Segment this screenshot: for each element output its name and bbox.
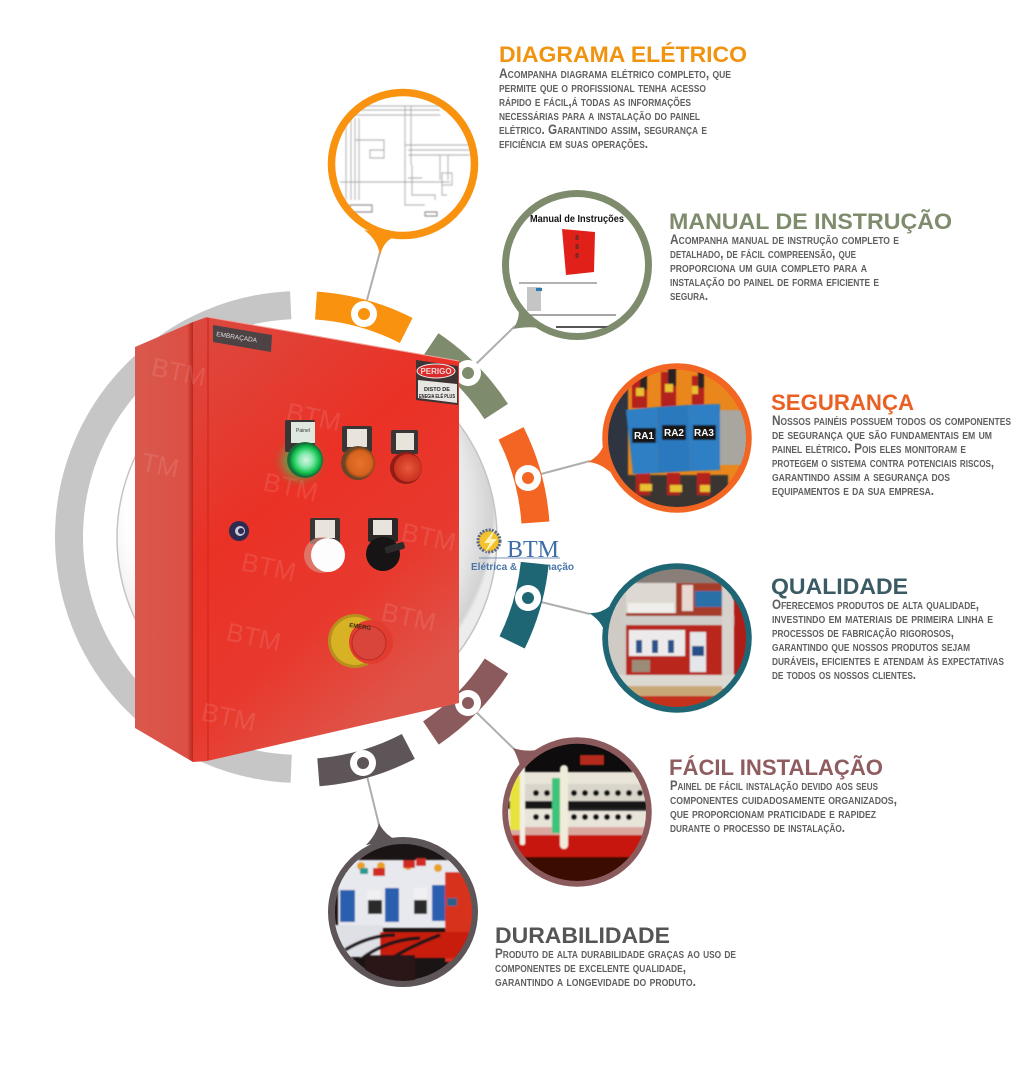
body: de segurança que são fundamentais em um	[772, 426, 992, 442]
terminal blocks photo	[506, 755, 648, 887]
callout circle: diagrama elétrico	[332, 92, 474, 256]
body: eficiência em suas operações.	[499, 135, 648, 151]
ring segment: diagrama	[50, 289, 550, 789]
body: Acompanha diagrama elétrico completo, que	[499, 65, 731, 81]
callout circle: durabilidade	[332, 823, 474, 984]
ring segment: manual	[0, 214, 625, 864]
watermarks: BTM	[239, 547, 299, 587]
body: processos de fabricação rigorosos,	[772, 624, 954, 640]
body: segura.	[670, 287, 708, 303]
body	[495, 945, 736, 989]
text block: segurança	[771, 390, 1011, 498]
watermarks	[139, 352, 459, 737]
body: permite que o profissional tenha acesso	[499, 79, 706, 95]
white button	[304, 518, 345, 573]
body: durante o processo de instalação.	[670, 819, 845, 835]
amber light	[341, 426, 375, 480]
watermarks: BTM	[399, 517, 459, 557]
body: componentes de excelente qualidade,	[495, 959, 686, 975]
warning sign: ENEGIA ELÉ PLUS	[419, 392, 456, 400]
body: Produto de alta durabilidade graças ao uso de	[495, 945, 736, 961]
manual photo	[519, 214, 624, 327]
connector lines	[366, 252, 590, 825]
emergency stop	[328, 614, 393, 668]
callout circle: fácil instalação	[506, 740, 648, 887]
body: proporciona um guia completo para a	[670, 259, 867, 275]
grey outer ring	[59, 295, 543, 779]
body	[772, 596, 1004, 682]
watermarks: BTM	[149, 352, 209, 392]
body	[670, 777, 897, 835]
heading: MANUAL DE INSTRUÇÃO	[669, 209, 952, 234]
heading: DIAGRAMA ELÉTRICO	[499, 42, 747, 67]
body	[670, 231, 899, 303]
body: que proporcionam praticidade e rapidez	[670, 805, 876, 821]
panel interior photo	[608, 569, 746, 707]
body: painel elétrico. Pois eles monitoram e	[772, 440, 966, 456]
warning sign: DISTO DE	[424, 387, 450, 393]
body: Acompanha manual de instrução completo e	[670, 231, 899, 247]
watermarks: BTM	[261, 467, 321, 507]
dark label: EMBRAÇADA	[216, 331, 258, 345]
callout circle: manual de instrução	[506, 194, 648, 336]
body: componentes cuidadosamente organizados,	[670, 791, 897, 807]
green light	[282, 420, 323, 479]
body: instalação do painel de forma eficiente e	[670, 273, 879, 289]
body: Oferecemos produtos de alta qualidade,	[772, 596, 979, 612]
watermarks: BTM	[379, 597, 439, 637]
text block: durabilidade	[495, 923, 736, 989]
callout circle: segurança	[588, 365, 750, 515]
BTM logo: Elétrica & Automação	[471, 561, 574, 573]
text block: fácil instalação	[669, 755, 897, 835]
ring segment: fácil instalação	[0, 215, 624, 863]
manual photo: Manual de Instruções	[530, 214, 624, 225]
selector switch	[366, 518, 405, 571]
heading: SEGURANÇA	[771, 390, 914, 415]
text block: qualidade	[771, 574, 1004, 682]
body	[499, 65, 731, 151]
ring segment: segurança	[0, 222, 617, 856]
panel front	[193, 317, 459, 762]
BTM logo: BTM	[507, 537, 559, 563]
body	[772, 412, 1011, 498]
body: garantindo a longevidade do produto.	[495, 973, 696, 989]
heading: QUALIDADE	[771, 574, 908, 599]
callout circle: segurança: RA2	[664, 428, 684, 439]
callout circle: segurança: RA3	[694, 428, 714, 439]
dark label	[213, 325, 272, 352]
BTM logo	[471, 529, 574, 573]
body: investindo em materiais de primeira linha e	[772, 610, 993, 626]
ring segment: durabilidade	[0, 223, 616, 855]
callout circle: segurança: RA1	[634, 431, 654, 442]
body: detalhado, de fácil compreensão, que	[670, 245, 856, 261]
body: de todos os nossos clientes.	[772, 666, 916, 682]
text block: diagrama elétrico	[499, 42, 747, 151]
ring segment: qualidade	[41, 280, 559, 798]
body: garantindo que nossos produtos sejam	[772, 638, 970, 654]
callout circle: qualidade	[589, 565, 750, 716]
body: equipamentos e da sua empresa.	[772, 482, 934, 498]
electrical diagram photo	[340, 106, 470, 216]
red electrical panel	[135, 317, 459, 762]
contactors photo	[333, 858, 473, 983]
body: garantindo assim a segurança dos	[772, 468, 950, 484]
watermarks: BTM	[224, 617, 284, 657]
voltage indicator	[229, 521, 249, 541]
text block: manual de instrução	[669, 209, 952, 303]
green light: Painel	[296, 428, 310, 434]
red button	[390, 430, 422, 484]
heading: FÁCIL INSTALAÇÃO	[669, 755, 883, 780]
watermarks: BTM	[199, 697, 259, 737]
heading: DURABILIDADE	[495, 923, 670, 948]
body: necessárias para a instalação do painel	[499, 107, 700, 123]
watermarks: TM	[139, 447, 182, 484]
watermarks: BTM	[284, 397, 344, 437]
body: rápido e fácil,á todas as informações	[499, 93, 691, 109]
warning sign: PERIGO	[420, 367, 452, 376]
emergency stop: EMERG	[349, 623, 372, 632]
panel side	[135, 322, 193, 762]
relays photo	[608, 369, 746, 507]
body: elétrico. Garantindo assim, segurança e	[499, 121, 707, 137]
inner grey disc	[117, 348, 497, 728]
body: Painel de fácil instalação devido aos seus	[670, 777, 878, 793]
warning sign	[416, 360, 458, 405]
